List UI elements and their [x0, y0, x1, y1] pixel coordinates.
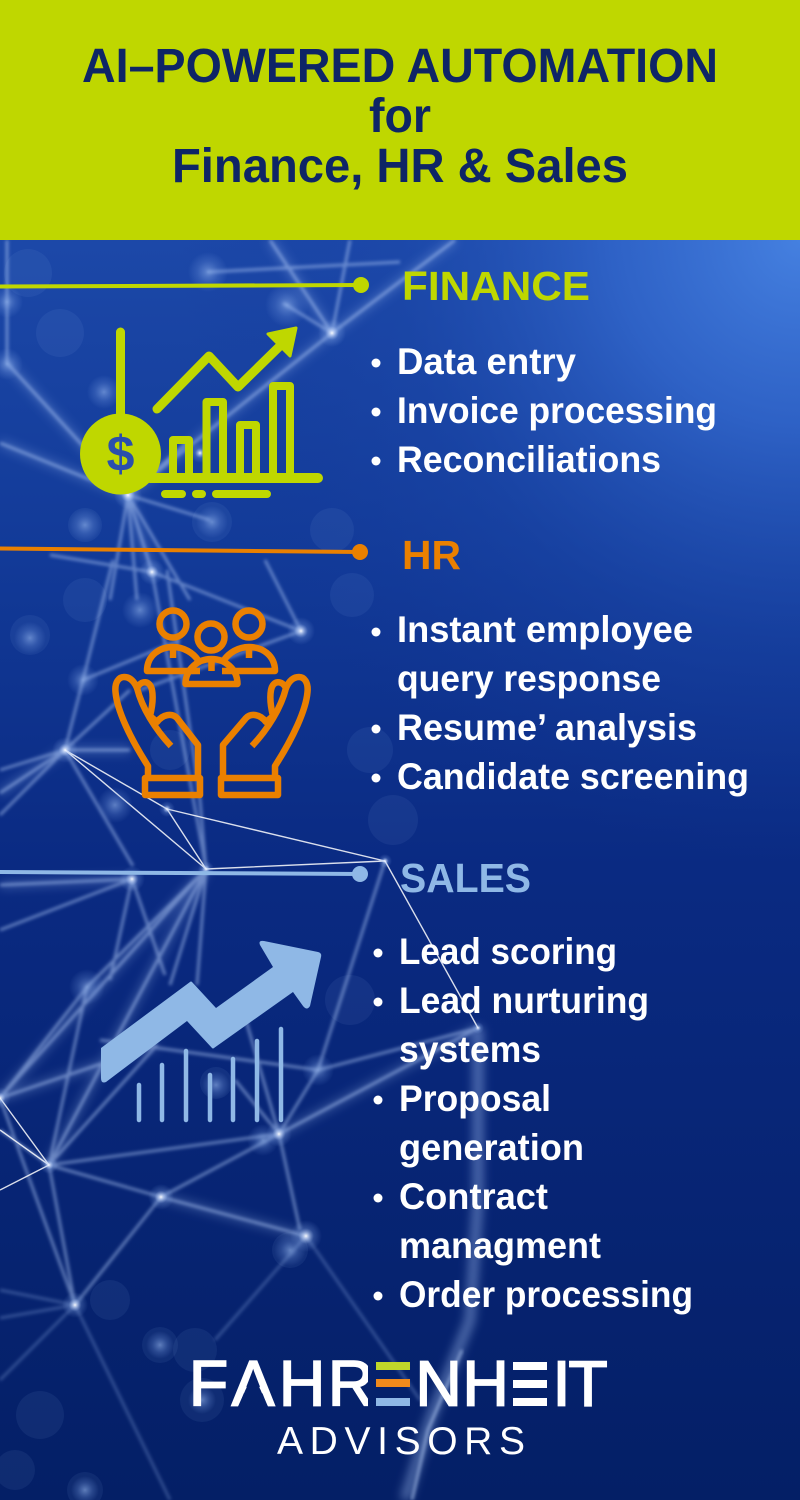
title: Finance, HR & Sales: [172, 140, 628, 193]
connector line: sales: [0, 866, 368, 882]
list: sales tasks: Contract: [399, 1176, 548, 1217]
list: hr tasks: [372, 609, 749, 797]
title: for: [369, 90, 431, 143]
heading: hr: HR: [402, 532, 461, 578]
connector line: finance: [0, 277, 369, 293]
list: sales tasks: managment: [399, 1225, 601, 1266]
panel: sales: [0, 855, 693, 1315]
list: hr tasks: Resume’ analysis: [397, 707, 697, 748]
title: AI–POWERED AUTOMATION: [82, 40, 718, 93]
list: finance tasks: [372, 341, 717, 480]
list: finance tasks: Data entry: [397, 341, 576, 382]
list: sales tasks: systems: [399, 1029, 541, 1070]
list: sales tasks: Proposal: [399, 1078, 551, 1119]
icon: finance chart with dollar coin: $: [107, 426, 135, 482]
list: sales tasks: Lead scoring: [399, 931, 617, 972]
heading: sales: SALES: [400, 855, 531, 901]
list: finance tasks: Reconciliations: [397, 439, 661, 480]
header band: [0, 0, 800, 240]
icon: rising arrow over bars: [101, 941, 321, 1120]
icon: finance chart with dollar coin: [80, 328, 318, 494]
logo subtitle: ADVISORS: [277, 1420, 525, 1463]
logo wordmark: [193, 1360, 608, 1407]
logo: Fahrenheit Advisors: [193, 1360, 608, 1454]
connector line: hr: [0, 544, 368, 560]
panel: hr: [0, 532, 749, 797]
list: finance tasks: Invoice processing: [397, 390, 717, 431]
heading: finance: FINANCE: [402, 263, 590, 309]
title: [82, 40, 718, 193]
logo wordmark: FAHRENHEIT: [189, 1348, 608, 1420]
list: sales tasks: Lead nurturing: [399, 980, 649, 1021]
list: hr tasks: Candidate screening: [397, 756, 749, 797]
panel: finance: [0, 263, 717, 494]
icon: people held in two hands: [115, 610, 308, 795]
list: sales tasks: generation: [399, 1127, 584, 1168]
list: hr tasks: Instant employee: [397, 609, 693, 650]
list: hr tasks: query response: [397, 658, 661, 699]
list: sales tasks: Order processing: [399, 1274, 693, 1315]
list: sales tasks: [374, 931, 693, 1315]
